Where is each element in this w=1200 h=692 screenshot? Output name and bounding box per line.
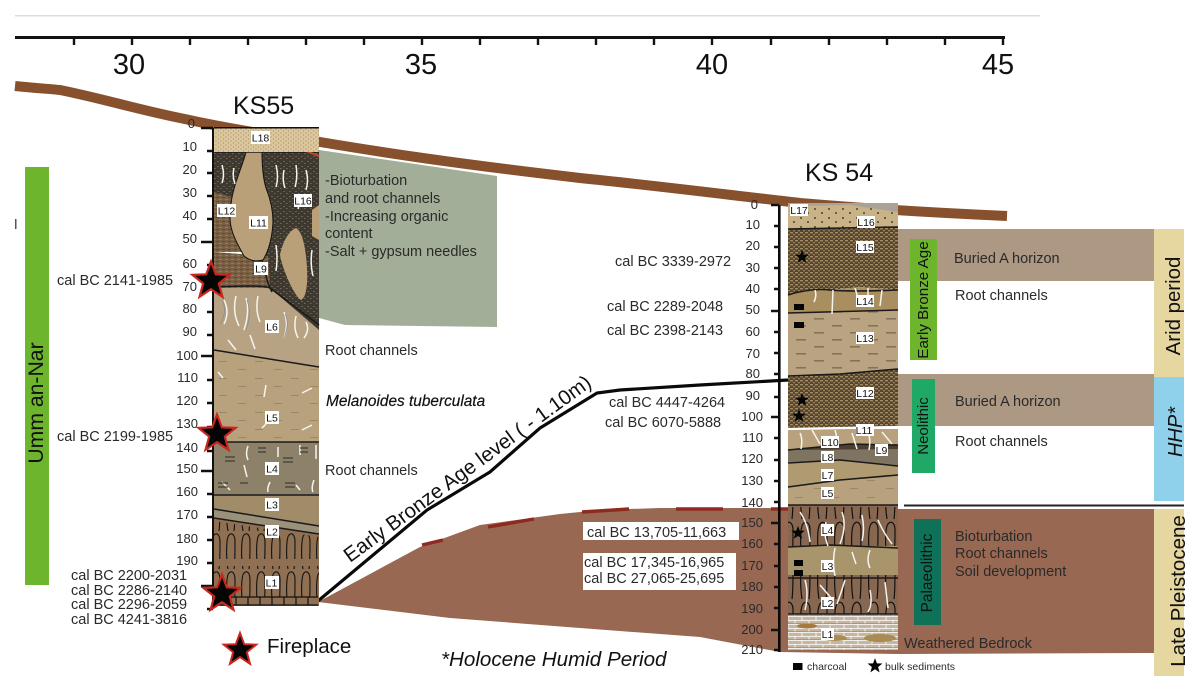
depth labels KS54: 160 bbox=[741, 536, 763, 551]
axis numbers bbox=[113, 49, 1014, 81]
bulk sediment stars bbox=[791, 250, 809, 539]
culture bar: Neolithic bbox=[912, 379, 935, 473]
depth labels KS55: 180 bbox=[176, 531, 198, 546]
date box: 13,705: cal BC 13,705-11,663 bbox=[587, 525, 726, 541]
surface line bbox=[15, 86, 1007, 216]
depth labels KS55: 70 bbox=[183, 279, 197, 294]
layer labels KS55: L1 bbox=[266, 578, 277, 590]
layer L4 bbox=[214, 442, 319, 496]
Melanoides note: Melanoides tuberculata bbox=[326, 393, 486, 410]
fireplace star at base bbox=[203, 574, 241, 610]
right annotations: Weathered Bedrock bbox=[904, 636, 1033, 652]
layer L3 bbox=[214, 495, 319, 526]
layer labels KS55: L2 bbox=[266, 526, 278, 538]
KS54 dates: cal BC 6070-5888 bbox=[605, 415, 721, 431]
layer labels KS54: L7 bbox=[822, 470, 833, 482]
column KS54 bbox=[741, 197, 898, 657]
KS54 dates bbox=[605, 254, 731, 431]
layer labels KS55: L18 bbox=[252, 132, 269, 144]
taupe band: lower buried A horizon bbox=[898, 374, 1155, 426]
period panel: Late Pleistocene: Late Pleistocene bbox=[1167, 515, 1190, 667]
layer L4 bbox=[788, 505, 898, 547]
top grey rule bbox=[15, 15, 1040, 16]
layer labels KS55 bbox=[217, 131, 312, 590]
layer L16 lower blob bbox=[280, 228, 307, 300]
depth labels KS55: 150 bbox=[176, 461, 198, 476]
layer L1 bbox=[788, 614, 898, 650]
layer L18 bbox=[214, 127, 319, 152]
depth labels KS55 bbox=[176, 116, 198, 568]
depth labels KS54: 100 bbox=[741, 409, 763, 424]
right annotations: Root channels bbox=[955, 546, 1048, 562]
depth labels KS55: 50 bbox=[183, 231, 197, 246]
depth labels KS54: 210 bbox=[741, 642, 763, 657]
title: KS 54: KS 54 bbox=[805, 159, 873, 187]
ticks KS54 bbox=[771, 205, 781, 652]
red dashes on palaeosurface bbox=[422, 509, 793, 545]
depth labels KS54: 10 bbox=[746, 217, 760, 232]
period panel: Arid period bbox=[1154, 229, 1185, 377]
legend: fireplace: Fireplace bbox=[267, 635, 351, 658]
date box: 17,345 and 27,065 bbox=[583, 553, 736, 590]
depth labels KS55: 20 bbox=[183, 162, 197, 177]
depth labels KS55: 170 bbox=[176, 507, 198, 522]
depth labels KS54: 120 bbox=[741, 451, 763, 466]
period panel: HHP bbox=[1154, 377, 1187, 501]
layer labels KS54 bbox=[790, 204, 888, 641]
depth labels KS55: 90 bbox=[183, 324, 197, 339]
title: KS55: KS55 bbox=[233, 92, 294, 120]
right annotations: Buried A horizon bbox=[955, 394, 1061, 410]
L11 white line bbox=[788, 427, 898, 429]
brown Pleistocene deposit bbox=[318, 508, 1155, 654]
depth labels KS55: 160 bbox=[176, 484, 198, 499]
layer L12 bbox=[214, 192, 245, 252]
small margin mark bbox=[15, 219, 16, 229]
fireplace star at 65 cm bbox=[192, 261, 230, 297]
KS54 dates: cal BC 4447-4264 bbox=[609, 395, 725, 411]
depth labels KS55: 140 bbox=[176, 440, 198, 455]
KS55 dates: cal BC 2286-2140 bbox=[71, 583, 187, 599]
depth labels KS54: 70 bbox=[746, 346, 760, 361]
depth labels KS55: 10 bbox=[183, 139, 197, 154]
right annotations: Buried A horizon bbox=[954, 251, 1060, 267]
KS54 dates: cal BC 2398-2143 bbox=[607, 323, 723, 339]
culture bar: Early Bronze Age: Early Bronze Age bbox=[915, 241, 932, 359]
layer L5 bbox=[214, 350, 319, 442]
layer labels KS54: L2 bbox=[822, 598, 833, 610]
right annotations: Root channels bbox=[955, 434, 1048, 450]
culture bar: Early Bronze Age bbox=[910, 239, 937, 360]
depth labels KS55: 40 bbox=[183, 208, 197, 223]
layer L3 bbox=[788, 546, 898, 578]
layer L7 bbox=[788, 460, 898, 487]
depth labels KS54: 90 bbox=[746, 388, 760, 403]
period panel: Late Pleistocene bbox=[1154, 509, 1190, 676]
KS55 root channels note upper: Root channels bbox=[325, 343, 418, 359]
depth labels KS54: 20 bbox=[746, 238, 760, 253]
layer labels KS54: L10 bbox=[821, 437, 839, 449]
right annotations bbox=[904, 251, 1066, 652]
layers L17 and L16 bbox=[788, 203, 898, 230]
depth labels KS55: 80 bbox=[183, 301, 197, 316]
depth labels KS54: 170 bbox=[741, 558, 763, 573]
layer L2 bbox=[214, 509, 319, 534]
fireplace star at 135 cm bbox=[198, 414, 236, 450]
layer labels KS54: L5 bbox=[822, 488, 833, 500]
depth labels KS55: 30 bbox=[183, 185, 197, 200]
date box: 17,345 and 27,065: cal BC 27,065-25,695 bbox=[584, 571, 724, 587]
depth labels KS54 bbox=[741, 197, 763, 657]
axis numbers: 40 bbox=[696, 49, 728, 81]
root marks KS54 bbox=[800, 288, 892, 612]
right annotations: Soil development bbox=[955, 564, 1066, 580]
legend: charcoal: charcoal bbox=[807, 661, 847, 673]
column KS55 bbox=[176, 116, 319, 609]
layer L11 blob bbox=[230, 152, 273, 261]
KS55 annotation text: content bbox=[325, 226, 373, 242]
layer labels KS55: L5 bbox=[266, 412, 278, 424]
charcoal marks bbox=[794, 304, 804, 576]
period divider bbox=[904, 504, 1184, 506]
layer L15 bbox=[788, 227, 898, 295]
right annotations: Root channels bbox=[955, 288, 1048, 304]
depth labels KS55: 60 bbox=[183, 256, 197, 271]
layer labels KS55: L11 bbox=[250, 218, 267, 230]
layer labels KS54: L4 bbox=[822, 525, 833, 537]
KS55 annotation text: and root channels bbox=[325, 191, 440, 207]
legend: bulk sediments bbox=[868, 658, 955, 673]
depth labels KS55: 100 bbox=[176, 348, 198, 363]
layer boundaries bbox=[214, 152, 319, 534]
layer labels KS54: L11 bbox=[856, 425, 873, 437]
distance axis bbox=[15, 36, 1014, 81]
layer labels KS55: L3 bbox=[266, 500, 278, 512]
axis numbers: 35 bbox=[405, 49, 437, 81]
depth labels KS54: 80 bbox=[746, 366, 760, 381]
culture bar: Umm an-Nar bbox=[25, 167, 49, 585]
culture bar: Neolithic: Neolithic bbox=[915, 397, 932, 455]
red mark bbox=[298, 148, 319, 156]
layer L16 dark fill bbox=[214, 152, 319, 330]
axis numbers: 30 bbox=[113, 49, 145, 81]
boundaries KS54 bbox=[788, 227, 898, 614]
layer labels KS54: L16 bbox=[857, 217, 875, 229]
right annotations: Bioturbation bbox=[955, 529, 1032, 545]
KS55 dates: cal BC 2296-2059 bbox=[71, 597, 187, 613]
depth labels KS55: 190 bbox=[176, 553, 198, 568]
depth labels KS54: 30 bbox=[746, 260, 760, 275]
layer L5 bbox=[788, 475, 898, 505]
layer L6 bbox=[214, 286, 319, 367]
layer labels KS55: L16 bbox=[294, 196, 312, 208]
depth labels KS54: 130 bbox=[741, 473, 763, 488]
layer labels KS54: L13 bbox=[856, 333, 874, 345]
depth labels KS54: 40 bbox=[746, 281, 760, 296]
legend: bulk sediments: bulk sediments bbox=[885, 661, 955, 673]
layer labels KS54: L17 bbox=[790, 205, 808, 217]
layer labels KS54: L12 bbox=[856, 388, 874, 400]
layer labels KS54: L3 bbox=[822, 561, 833, 573]
depth labels KS55: 120 bbox=[176, 393, 198, 408]
layer labels KS54: L1 bbox=[822, 629, 833, 641]
KS55 dates: cal BC 2200-2031 bbox=[71, 568, 187, 584]
Early Bronze Age level label: Early Bronze Age level ( - 1.10m) bbox=[339, 371, 596, 567]
layer L12 bbox=[788, 369, 898, 429]
culture bar: Palaeolithic: Palaeolithic bbox=[919, 533, 936, 612]
KS55 annotation text bbox=[325, 173, 477, 260]
taupe band: upper buried A horizon bbox=[898, 229, 1155, 281]
period panel: Arid period: Arid period bbox=[1163, 257, 1185, 355]
layer L8 bbox=[788, 449, 898, 466]
layer L13 bbox=[788, 310, 898, 376]
layer labels KS54: L14 bbox=[856, 296, 874, 308]
layer L16 right blob bbox=[312, 205, 319, 240]
layer L2 bbox=[788, 575, 898, 615]
layer L9 bbox=[788, 444, 898, 452]
layer labels KS55: L4 bbox=[266, 464, 278, 476]
depth labels KS54: 50 bbox=[746, 302, 760, 317]
depth labels KS54: 200 bbox=[741, 622, 763, 637]
depth labels KS55: 0 bbox=[188, 116, 195, 131]
layer labels KS54: L15 bbox=[856, 242, 874, 254]
grey-green annotation panel bbox=[319, 150, 497, 327]
depth labels KS54: 180 bbox=[741, 579, 763, 594]
footnote: Holocene Humid Period: *Holocene Humid Period bbox=[441, 648, 667, 671]
axis KS55 bbox=[201, 128, 214, 609]
KS55 annotation text: -Salt + gypsum needles bbox=[325, 244, 477, 260]
KS54 dates: cal BC 2289-2048 bbox=[607, 299, 723, 315]
depth labels KS54: 60 bbox=[746, 324, 760, 339]
root marks bbox=[218, 165, 316, 492]
layer L1 bbox=[214, 517, 319, 606]
layer labels KS54: L9 bbox=[876, 445, 887, 457]
axis numbers: 45 bbox=[982, 49, 1014, 81]
period panel: HHP: HHP* bbox=[1165, 406, 1187, 457]
KS55 dates: cal BC 2141-1985 bbox=[57, 273, 173, 289]
KS55 dates bbox=[57, 273, 187, 628]
culture bar: Palaeolithic bbox=[914, 519, 941, 625]
KS54 dates: cal BC 3339-2972 bbox=[615, 254, 731, 270]
Early Bronze Age level line bbox=[318, 380, 788, 601]
depth labels KS54: 150 bbox=[741, 515, 763, 530]
depth labels KS54: 0 bbox=[751, 197, 758, 212]
KS55 annotation text: -Bioturbation bbox=[325, 173, 407, 189]
layer L9 bbox=[214, 252, 270, 288]
date box: 17,345 and 27,065: cal BC 17,345-16,965 bbox=[584, 555, 724, 571]
depth labels KS55: 130 bbox=[176, 416, 198, 431]
depth labels KS55: 110 bbox=[177, 370, 198, 385]
depth labels KS54: 110 bbox=[742, 430, 763, 445]
depth labels KS54: 190 bbox=[741, 601, 763, 616]
KS55 dates: cal BC 4241-3816 bbox=[71, 612, 187, 628]
layer labels KS55: L6 bbox=[266, 322, 278, 334]
layer labels KS55: L12 bbox=[218, 206, 235, 218]
KS55 dates: cal BC 2199-1985 bbox=[57, 429, 173, 445]
depth labels KS54: 140 bbox=[741, 495, 763, 510]
layer L10 bbox=[788, 429, 898, 451]
legend: fireplace bbox=[224, 633, 351, 664]
layer labels KS54: L8 bbox=[822, 452, 833, 464]
KS55 root channels note lower: Root channels bbox=[325, 463, 418, 479]
layer labels KS55: L9 bbox=[255, 264, 267, 276]
culture bar: Umm an-Nar: Umm an-Nar bbox=[25, 342, 48, 464]
KS55 annotation text: -Increasing organic bbox=[325, 209, 448, 225]
layer L14 bbox=[788, 287, 898, 313]
